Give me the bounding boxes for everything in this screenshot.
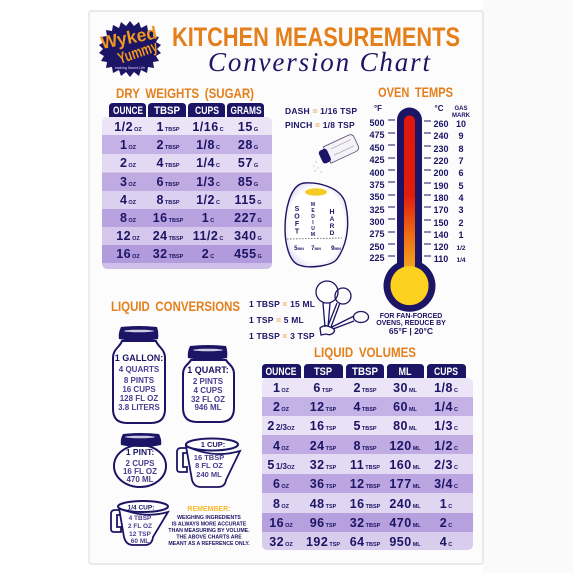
- icon: quarter cup measure: 12 TSP: [129, 531, 151, 538]
- fahrenheit scale: 350: [369, 192, 385, 202]
- gas mark scale: GAS: [454, 106, 468, 112]
- table rows: liquid volumes: 120ML: [389, 439, 421, 453]
- note: fan-forced ovens: [376, 313, 446, 336]
- table rows: dry weights: 1/3C: [196, 175, 220, 189]
- table rows: dry weights: 227G: [234, 211, 262, 225]
- icon: egg doneness diagram: U: [311, 226, 315, 232]
- fahrenheit scale: 500: [369, 118, 385, 128]
- fahrenheit scale: °F: [374, 104, 382, 113]
- note: remember: IS ALWAYS MORE ACCURATE: [172, 522, 247, 528]
- icon: egg doneness diagram: R: [330, 223, 335, 230]
- table header: dry weights: CUPS: [195, 105, 219, 117]
- table rows: liquid volumes: 240ML: [389, 497, 421, 511]
- table rows: liquid volumes: 2C: [440, 516, 452, 530]
- table rows: liquid volumes: 96TSP: [310, 516, 337, 530]
- table rows: dry weights: 4TBSP: [156, 156, 180, 170]
- table rows: dry weights: 1/4C: [196, 156, 220, 170]
- icon: quarter cup measure: [111, 501, 168, 545]
- table rows: dry weights: 16TBSP: [153, 211, 184, 225]
- table rows: liquid volumes: 12TSP: [310, 400, 337, 414]
- table header: dry weights: OUNCE: [113, 105, 143, 117]
- text: dash and pinch: PINCH = 1/8 TSP: [285, 120, 355, 130]
- table rows: dry weights: 57G: [238, 156, 258, 170]
- note: remember: REMEMBER:: [187, 506, 231, 513]
- table rows: liquid volumes: 1C: [440, 497, 452, 511]
- table rows: liquid volumes: 2OZ: [273, 400, 290, 414]
- gas mark scale: 10: [456, 119, 466, 129]
- table rows: dry weights: 340G: [234, 229, 262, 243]
- note: remember: THAN MEASURING BY VOLUME.: [168, 528, 250, 534]
- table rows: liquid volumes: 950ML: [389, 535, 421, 549]
- celsius scale: 110: [434, 254, 448, 264]
- table bands: dry weights: [102, 117, 272, 269]
- table rows: liquid volumes: 60ML: [393, 400, 418, 414]
- table rows: liquid volumes: 12TBSP: [350, 477, 381, 491]
- gas mark scale: 4: [458, 193, 464, 203]
- celsius scale: [424, 104, 449, 264]
- icon: egg doneness diagram: I: [312, 220, 314, 226]
- table rows: liquid volumes: 1OZ: [273, 381, 290, 395]
- fahrenheit scale: 475: [369, 130, 385, 140]
- gas mark scale: 1/4: [456, 257, 466, 264]
- table rows: liquid volumes: 80ML: [393, 419, 418, 433]
- icon: quart jar: 1 QUART:: [187, 365, 229, 375]
- panel: dry weights table: [102, 103, 272, 269]
- icon: one cup measure: 16 TBSP: [194, 453, 224, 462]
- icon: gallon jar: [113, 326, 165, 423]
- table rows: liquid volumes: 1/2C: [434, 439, 458, 453]
- text: spoon conversions: 1 TBSP = 3 TSP: [249, 331, 315, 341]
- gas mark scale: 5: [458, 181, 464, 191]
- table rows: dry weights: 2OZ: [120, 156, 137, 170]
- icon: quart jar: 4 CUPS: [194, 386, 223, 395]
- heading: liquid volumes: LIQUID VOLUMES: [314, 344, 416, 360]
- text: dash and pinch: [285, 106, 357, 130]
- table rows: dry weights: 24TBSP: [153, 229, 184, 243]
- fahrenheit scale: 300: [369, 217, 385, 227]
- table rows: liquid volumes: 16TBSP: [350, 497, 381, 511]
- table rows: dry weights: 1OZ: [120, 138, 137, 152]
- gas mark scale: 9: [458, 131, 464, 141]
- table rows: dry weights: 32TBSP: [153, 247, 184, 261]
- icon: quart jar: 32 FL OZ: [191, 395, 225, 404]
- icon: one cup measure: 1 CUP:: [201, 440, 225, 449]
- gas mark scale: 7: [458, 156, 464, 166]
- gas mark scale: 3: [458, 205, 464, 215]
- icon: quart jar: 2 PINTS: [193, 377, 224, 386]
- table rows: dry weights: 115G: [235, 193, 261, 207]
- table header: liquid volumes: ML: [398, 366, 412, 378]
- table rows: liquid volumes: 16TSP: [310, 419, 337, 433]
- icon: egg doneness diagram: O: [294, 214, 300, 220]
- table rows: dry weights: 85G: [238, 175, 258, 189]
- note: fan-forced ovens: OVENS, REDUCE BY: [376, 320, 446, 327]
- icon: gallon jar: 16 CUPS: [122, 385, 156, 394]
- table header: liquid volumes: OUNCE: [266, 366, 296, 378]
- table rows: liquid volumes: 16OZ: [269, 516, 293, 530]
- table rows: dry weights: 11/2C: [193, 229, 223, 243]
- gas mark scale: 1/2: [456, 245, 466, 252]
- table rows: liquid volumes: 160ML: [389, 458, 421, 472]
- icon: pint jar: 16 FL OZ: [123, 467, 157, 476]
- table rows: liquid volumes: 1/4C: [434, 400, 458, 414]
- icon: gallon jar: 8 PINTS: [124, 376, 155, 385]
- table rows: liquid volumes: 8TBSP: [353, 439, 377, 453]
- fahrenheit scale: [369, 104, 395, 263]
- table rows: dry weights: 1/8C: [196, 138, 220, 152]
- table rows: liquid volumes: 177ML: [389, 477, 421, 491]
- table rows: dry weights: 1/2C: [196, 193, 220, 207]
- table rows: liquid volumes: 32TBSP: [350, 516, 381, 530]
- fahrenheit scale: 275: [369, 229, 385, 239]
- table rows: dry weights: 1/16C: [192, 120, 224, 134]
- icon: egg doneness diagram: 7MIN: [311, 246, 321, 252]
- table rows: dry weights: 2TBSP: [156, 138, 180, 152]
- note: remember: [168, 506, 250, 547]
- table rows: dry weights: 2C: [202, 247, 214, 261]
- icon: egg doneness diagram: 9MIN: [331, 246, 341, 252]
- icon: egg doneness diagram: S: [295, 206, 300, 213]
- subtitle: Conversion Chart: [208, 47, 431, 77]
- gas mark scale: 2: [458, 218, 464, 228]
- text: spoon conversions: 1 TSP = 5 ML: [249, 315, 304, 325]
- table rows: liquid volumes: 64TBSP: [350, 535, 381, 549]
- table rows: dry weights: 16OZ: [116, 247, 140, 261]
- icon: measuring spoons: [316, 281, 368, 335]
- table rows: liquid volumes: 1/8C: [434, 381, 458, 395]
- table header: dry weights: TBSP: [154, 105, 180, 117]
- icon: egg doneness diagram: M: [311, 232, 315, 238]
- fahrenheit scale: 325: [369, 205, 385, 215]
- note: remember: THE ABOVE CHARTS ARE: [176, 534, 242, 540]
- gas mark scale: 1: [458, 230, 464, 240]
- icon: egg doneness diagram: T: [295, 228, 300, 236]
- icon: egg doneness diagram: H: [329, 209, 335, 216]
- table rows: liquid volumes: 192TSP: [306, 535, 340, 549]
- table rows: liquid volumes: 4OZ: [273, 439, 290, 453]
- celsius scale: 180: [433, 193, 449, 203]
- table header: liquid volumes: TSP: [314, 366, 332, 378]
- note: fan-forced ovens: 65°F | 20°C: [389, 326, 433, 336]
- table rows: liquid volumes: 4TBSP: [353, 400, 377, 414]
- table bands: liquid volumes: [262, 378, 473, 550]
- table rows: liquid volumes: 8OZ: [273, 497, 290, 511]
- icon: egg doneness diagram: [285, 183, 348, 267]
- panel: liquid volumes table: [262, 364, 473, 550]
- table rows: dry weights: [114, 120, 262, 261]
- logo: Wyked Yummy badge: making Sweet Life: [115, 66, 145, 70]
- icon: gallon jar: 128 FL OZ: [120, 394, 158, 403]
- table rows: liquid volumes: 6TSP: [313, 381, 333, 395]
- table header: dry weights: GRAMS: [230, 105, 262, 117]
- celsius scale: 260: [433, 119, 449, 129]
- table rows: liquid volumes: 6OZ: [273, 477, 290, 491]
- heading: dry weights: DRY WEIGHTS (SUGAR): [116, 85, 254, 101]
- table rows: dry weights: 1/2OZ: [114, 120, 142, 134]
- icon: quart jar: 946 ML: [194, 403, 222, 412]
- gas mark scale: 6: [458, 168, 464, 178]
- table rows: dry weights: 12OZ: [116, 229, 140, 243]
- celsius scale: 220: [433, 156, 449, 166]
- logo: Wyked Yummy badge: [99, 21, 161, 77]
- table rows: liquid volumes: 4C: [440, 535, 452, 549]
- celsius scale: °C: [435, 104, 444, 113]
- table rows: liquid volumes: 3/4C: [434, 477, 458, 491]
- icon: one cup measure: [177, 438, 240, 487]
- fahrenheit scale: 225: [369, 253, 385, 263]
- icon: egg doneness diagram: D: [311, 214, 315, 220]
- note: fan-forced ovens: FOR FAN-FORCED: [380, 313, 442, 320]
- fahrenheit scale: 400: [369, 168, 385, 178]
- celsius scale: 190: [433, 181, 449, 191]
- table rows: dry weights: 1TBSP: [156, 120, 180, 134]
- icon: quart jar: [183, 345, 234, 422]
- text: spoon conversions: 1 TBSP = 15 ML: [249, 299, 315, 309]
- table rows: liquid volumes: [267, 381, 458, 549]
- icon: quarter cup measure: 4 TBSP: [129, 515, 152, 522]
- table rows: liquid volumes: 48TSP: [310, 497, 337, 511]
- heading: liquid conversions: LIQUID CONVERSIONS: [111, 298, 240, 314]
- icon: pint jar: 2 CUPS: [126, 459, 155, 468]
- celsius scale: 200: [433, 168, 449, 178]
- celsius scale: 240: [433, 131, 449, 141]
- logo: Wyked Yummy badge: Yummy: [116, 38, 160, 68]
- gas mark scale: MARK: [452, 113, 471, 119]
- icon: quarter cup measure: 60 ML: [131, 538, 149, 545]
- table rows: liquid volumes: 1/3C: [434, 419, 458, 433]
- note: remember: MEANT AS A REFERENCE ONLY.: [168, 541, 250, 547]
- fahrenheit scale: 450: [369, 143, 385, 153]
- icon: gallon jar: 1 GALLON:: [115, 353, 163, 363]
- icon: egg doneness diagram: F: [295, 221, 300, 228]
- icon: quarter cup measure: 1/4 CUP:: [128, 504, 154, 512]
- table rows: dry weights: 455G: [234, 247, 262, 261]
- thermometer body: [384, 108, 436, 312]
- table rows: liquid volumes: 11TBSP: [350, 458, 380, 472]
- table rows: liquid volumes: 51/3OZ: [267, 458, 295, 472]
- gas mark scale: [452, 106, 471, 264]
- icon: gallon jar: 3.8 LITERS: [118, 403, 161, 412]
- table rows: liquid volumes: 32TSP: [310, 458, 337, 472]
- table rows: dry weights: 15G: [238, 120, 258, 134]
- icon: one cup measure: 240 ML: [196, 470, 222, 479]
- fahrenheit scale: 375: [369, 180, 385, 190]
- table rows: liquid volumes: 5TBSP: [353, 419, 377, 433]
- table rows: liquid volumes: 24TSP: [310, 439, 337, 453]
- gas mark scale: 8: [458, 144, 464, 154]
- icon: gallon jar: 4 QUARTS: [119, 365, 160, 374]
- icon: egg doneness diagram: D: [330, 230, 335, 237]
- celsius scale: 170: [433, 205, 449, 215]
- celsius scale: 120: [433, 242, 449, 252]
- table rows: liquid volumes: 2TBSP: [353, 381, 377, 395]
- table rows: liquid volumes: 470ML: [389, 516, 421, 530]
- table rows: dry weights: 1C: [202, 211, 214, 225]
- table header: liquid volumes: TBSP: [352, 366, 378, 378]
- fahrenheit scale: 425: [369, 155, 385, 165]
- table rows: liquid volumes: 30ML: [393, 381, 418, 395]
- heading: oven temps: OVEN TEMPS: [378, 84, 453, 100]
- icon: egg doneness diagram: E: [311, 208, 315, 214]
- celsius scale: 140: [433, 230, 449, 240]
- table rows: liquid volumes: 32OZ: [269, 535, 293, 549]
- table header: dry weights: [109, 103, 264, 117]
- logo: Wyked Yummy badge: Wyked: [99, 22, 159, 53]
- table rows: dry weights: 4OZ: [120, 193, 137, 207]
- title: KITCHEN MEASUREMENTS: [172, 22, 460, 52]
- table rows: liquid volumes: 22/3OZ: [267, 419, 295, 433]
- note: remember: WEIGHING INGREDIENTS: [177, 515, 241, 521]
- icon: pint jar: 470 ML: [126, 475, 154, 484]
- icon: pint jar: [114, 433, 166, 487]
- celsius scale: 230: [433, 144, 449, 154]
- icon: egg doneness diagram: M: [311, 202, 315, 208]
- icon: one cup measure: 8 FL OZ: [195, 461, 223, 470]
- chart: oven thermometer: [369, 104, 471, 312]
- table header: liquid volumes: [262, 364, 466, 378]
- fahrenheit scale: 250: [369, 242, 385, 252]
- celsius scale: 150: [433, 218, 449, 228]
- table rows: liquid volumes: 2/3C: [434, 458, 458, 472]
- text: spoon conversions: [249, 299, 315, 341]
- text: dash and pinch: DASH = 1/16 TSP: [285, 106, 357, 116]
- table rows: dry weights: 3OZ: [120, 175, 137, 189]
- icon: quarter cup measure: 2 FL OZ: [128, 523, 152, 530]
- table rows: dry weights: 8OZ: [120, 211, 137, 225]
- icon: egg doneness diagram: A: [330, 216, 335, 223]
- table rows: liquid volumes: 36TSP: [310, 477, 337, 491]
- icon: salt shaker: [313, 133, 360, 173]
- table header: liquid volumes: CUPS: [434, 366, 458, 378]
- icon: egg doneness diagram: 5MIN: [294, 246, 304, 252]
- table rows: dry weights: 28G: [238, 138, 258, 152]
- table rows: dry weights: 8TBSP: [156, 193, 180, 207]
- icon: pint jar: 1 PINT:: [126, 447, 154, 457]
- table rows: dry weights: 6TBSP: [156, 175, 180, 189]
